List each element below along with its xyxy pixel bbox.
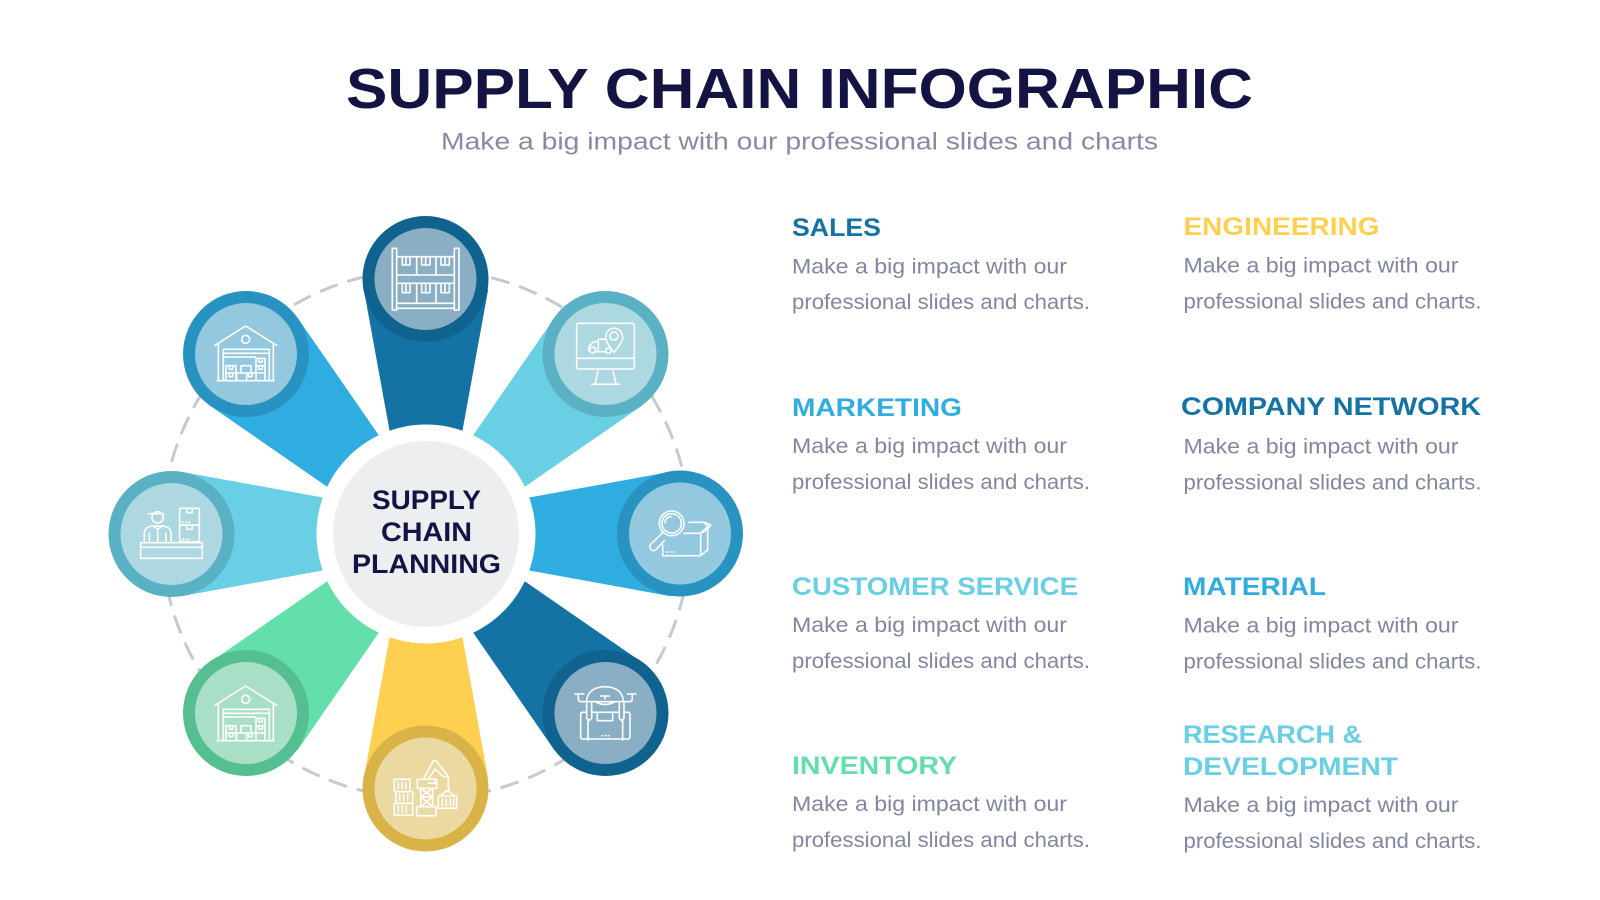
- subtitle: Make a big impact with our professional slides and charts: [441, 128, 1158, 156]
- radial diagram: [108, 216, 743, 852]
- text block: customer service: [792, 573, 1090, 673]
- text block: research and development: professional slides and charts.: [1184, 830, 1482, 853]
- icon: clerk with parcels: [141, 508, 202, 558]
- text block: research and development: DEVELOPMENT: [1183, 753, 1398, 781]
- text block: company network: Make a big impact with our: [1184, 436, 1459, 458]
- text block: inventory: [792, 752, 1090, 852]
- text block: engineering: professional slides and charts.: [1184, 290, 1482, 314]
- text block: material: [1183, 573, 1482, 674]
- hub label: SUPPLY: [372, 485, 481, 515]
- text block: inventory: professional slides and charts.: [792, 829, 1090, 852]
- text block: sales: Make a big impact with our: [792, 256, 1067, 278]
- text block: customer service: CUSTOMER SERVICE: [792, 573, 1078, 601]
- spoke: bottom right, drone: [439, 547, 668, 776]
- icon: monitor with truck and pin: [577, 323, 634, 384]
- text block: marketing: MARKETING: [792, 394, 962, 422]
- central hub: [316, 424, 536, 644]
- text block: marketing: professional slides and charts.: [792, 471, 1090, 494]
- icon: crane and containers: [394, 760, 457, 816]
- spoke: left, customer service desk: [108, 471, 346, 597]
- text block: engineering: Make a big impact with our: [1184, 254, 1459, 278]
- icon: delivery drone: [575, 687, 636, 740]
- spoke: bottom left, warehouse: [183, 547, 413, 776]
- hub label: PLANNING: [352, 549, 501, 579]
- dashed ring: [162, 270, 690, 798]
- text block: inventory: Make a big impact with our: [792, 793, 1067, 816]
- spoke: top left, warehouse: [183, 291, 413, 521]
- text block: sales: [792, 214, 1090, 314]
- text block: material: MATERIAL: [1183, 573, 1326, 601]
- text block: research and development: Make a big impact with our: [1184, 794, 1459, 817]
- text block: sales: professional slides and charts.: [792, 291, 1090, 314]
- icon: magnifier over box: [650, 511, 711, 556]
- text block: customer service: professional slides and charts.: [792, 650, 1090, 673]
- text block: inventory: INVENTORY: [792, 752, 957, 780]
- text block: sales: SALES: [792, 214, 881, 242]
- title: SUPPLY CHAIN INFOGRAPHIC: [346, 57, 1253, 121]
- hub label: [352, 485, 501, 579]
- spoke: top right, route tracking: [439, 291, 668, 521]
- spoke: top, shelving: [362, 216, 488, 454]
- spoke: bottom, port crane: [362, 614, 488, 852]
- icon: warehouse shelves: [392, 248, 459, 310]
- text block: company network: [1181, 393, 1482, 494]
- icon: warehouse: [215, 326, 277, 381]
- text block: customer service: Make a big impact with our: [792, 614, 1067, 637]
- text block: material: Make a big impact with our: [1184, 614, 1459, 638]
- text block: research and development: [1183, 721, 1482, 853]
- text block: marketing: Make a big impact with our: [792, 435, 1067, 458]
- text block: marketing: [792, 394, 1090, 494]
- hub label: CHAIN: [381, 517, 472, 547]
- text block: company network: professional slides and charts.: [1184, 472, 1482, 494]
- text block: material: professional slides and charts.: [1184, 650, 1482, 674]
- spoke: right, product inspection: [506, 470, 743, 596]
- text block: engineering: ENGINEERING: [1184, 213, 1380, 241]
- text block: research and development: RESEARCH &: [1183, 721, 1362, 749]
- text block: engineering: [1184, 213, 1482, 314]
- icon: warehouse: [215, 686, 277, 741]
- text block: company network: COMPANY NETWORK: [1181, 393, 1481, 421]
